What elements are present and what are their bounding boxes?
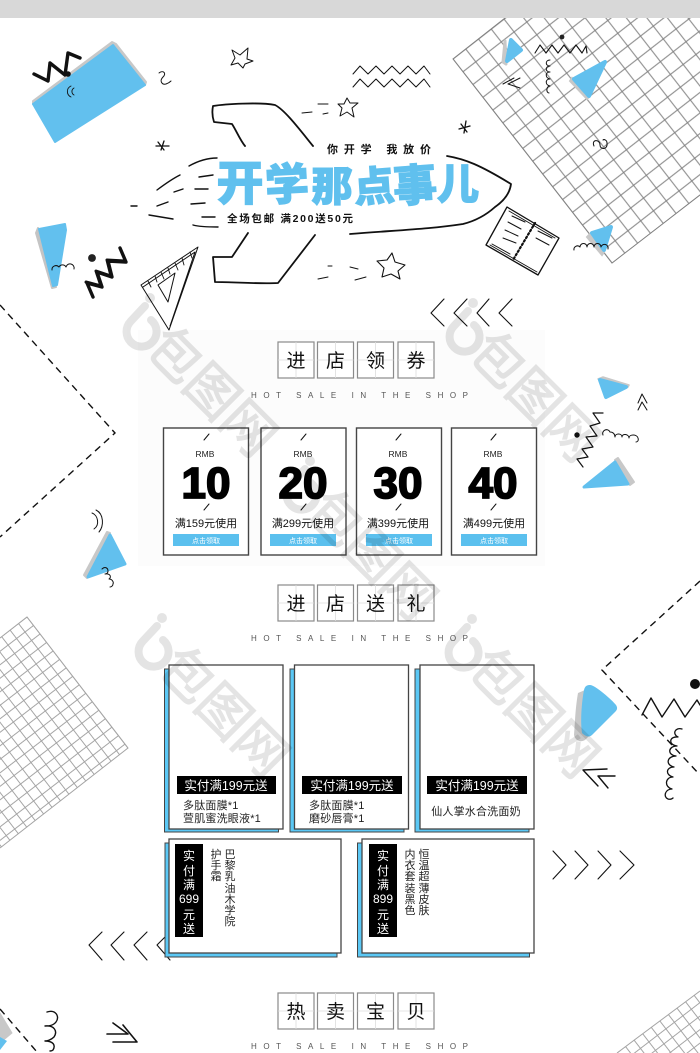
coupon card RMB 30 <box>356 428 442 555</box>
gift card 5 wide: 装 <box>404 882 416 895</box>
coupon card RMB 30: RMB <box>389 449 408 459</box>
coupon card RMB 40: 满499元使用 <box>463 517 525 530</box>
gift card 5 wide: 超 <box>418 869 430 883</box>
title: 儿 <box>437 161 479 208</box>
section heading: 进店领券 <box>278 342 434 378</box>
gift card 5 wide: 薄 <box>418 881 430 895</box>
gift card 4 wide: 元 <box>183 908 195 922</box>
rocket outline <box>212 103 511 283</box>
section heading: 热卖宝贝: 宝 <box>366 1001 385 1023</box>
gift card 5 wide: 付 <box>377 864 389 878</box>
coupon card RMB 20: 20 <box>279 459 327 508</box>
grid paper: top right <box>453 18 700 263</box>
coupon card RMB 20: 满299元使用 <box>272 517 334 530</box>
watermark 1: 包图网 <box>135 317 287 468</box>
gift card 2: 实付满199元送 <box>310 778 394 793</box>
gift card 5 wide: 黑 <box>404 893 416 906</box>
decoration: left triangle with arcs <box>84 510 125 587</box>
section heading: 进店领券: 券 <box>406 350 426 372</box>
decoration: bottom left doodles <box>0 1011 137 1051</box>
coupon card RMB 10: RMB <box>196 449 215 459</box>
coupon card RMB 20 <box>261 428 346 555</box>
title: 那 <box>312 164 352 210</box>
gift card 5 wide: 实 <box>377 848 389 863</box>
coupon section background panel <box>138 330 545 566</box>
gift card 5 wide: 温 <box>418 859 430 872</box>
title: 开 <box>216 157 264 210</box>
decoration: blue tilted rectangle with zigzag <box>33 42 146 142</box>
coupon card RMB 10: 10 <box>182 459 230 508</box>
icon: set square ruler <box>141 247 198 330</box>
gift card 1: 多肽面膜*1 <box>183 798 239 812</box>
section heading: 热卖宝贝: 卖 <box>326 1001 345 1023</box>
zigzag pair <box>353 66 430 87</box>
icon: star near rocket <box>338 98 358 117</box>
section heading: 进店送礼: 礼 <box>406 593 426 615</box>
gift card 5 wide: 满 <box>377 878 389 892</box>
gift card 3: 实付满199元送 <box>435 778 519 793</box>
gift card 4 wide: 实 <box>183 848 195 863</box>
coupon card RMB 30: 满399元使用 <box>367 517 429 530</box>
coupon card RMB 10 <box>164 428 248 555</box>
gift card 4 wide: 付 <box>183 864 195 878</box>
watermark 3: 包图网 <box>295 480 447 631</box>
section heading: 进店送礼: 店 <box>326 593 345 615</box>
title: 点 <box>352 163 396 211</box>
title <box>216 157 479 212</box>
gift card 4 wide: 木 <box>224 893 236 906</box>
section heading: 进店领券: 店 <box>326 350 345 372</box>
decoration: right side triangles and zigzag <box>574 377 647 487</box>
coupon card RMB 20: RMB <box>294 449 313 459</box>
section heading: 进店送礼: 进 <box>286 593 306 615</box>
gift card 5 wide: 899 <box>373 892 393 906</box>
gift card 5 wide: 衣 <box>404 858 416 872</box>
grid paper: lower left <box>0 617 128 848</box>
coupon card RMB 10: 点击领取 <box>192 536 220 545</box>
gift card 2: 多肽面膜*1 <box>309 798 365 812</box>
coupon card RMB 10: 满159元使用 <box>175 517 237 530</box>
coupon card RMB 30: 点击领取 <box>385 536 413 545</box>
section tagline 3: HOT SALE IN THE SHOP <box>251 1042 468 1051</box>
watermark 2: 包图网 <box>458 322 610 473</box>
watermark 5: 包图网 <box>457 638 609 789</box>
section heading: 进店送礼 <box>278 585 434 621</box>
icon: large star <box>377 253 405 279</box>
gift card 3 <box>415 665 534 832</box>
chevrons: left row <box>89 932 170 960</box>
chevrons: right row <box>553 851 634 879</box>
section tagline 2: HOT SALE IN THE SHOP <box>251 634 468 643</box>
coupon card RMB 20: 点击领取 <box>289 536 317 545</box>
gift card 4 wide: 满 <box>183 878 195 892</box>
dashed diamond outlines <box>0 305 700 1052</box>
coupon card RMB 40: 点击领取 <box>480 536 508 545</box>
gift card 4 wide <box>165 839 341 957</box>
section heading: 热卖宝贝 <box>278 993 434 1029</box>
gift card 4 wide: 护 <box>210 847 222 861</box>
gift card 2: 磨砂唇膏*1 <box>309 811 365 825</box>
title: 事 <box>391 161 439 212</box>
gift card 5 wide: 色 <box>404 903 416 917</box>
gift card 5 wide: 套 <box>404 870 416 883</box>
gift card 5 wide: 肤 <box>418 903 430 917</box>
gift card 4 wide: 乳 <box>224 870 236 883</box>
gift card 5 wide: 恒 <box>418 848 430 861</box>
gift card 5 wide: 送 <box>377 921 389 936</box>
grid paper: bottom right <box>617 991 700 1053</box>
small doodles: asterisks and squiggles <box>156 72 607 150</box>
title: 学 <box>264 160 310 211</box>
gift card 4 wide: 霜 <box>210 870 222 883</box>
coupon card RMB 40 <box>452 428 536 555</box>
gift card 1 <box>164 665 283 832</box>
gift card 4 wide: 油 <box>224 881 236 895</box>
gift card 1: 萱肌蜜洗眼液*1 <box>183 811 261 825</box>
rocket speed lines <box>131 104 366 280</box>
chevrons: top row <box>431 299 512 326</box>
section heading: 热卖宝贝: 热 <box>286 1001 306 1023</box>
watermark 4: 包图网 <box>147 637 299 788</box>
section tagline 1: HOT SALE IN THE SHOP <box>251 391 468 400</box>
gift card 4 wide: 手 <box>210 858 222 872</box>
gift card 5 wide: 皮 <box>418 893 430 906</box>
gift card 1: 实付满199元送 <box>184 778 268 793</box>
gift card 4 wide: 院 <box>224 914 236 928</box>
coupon card RMB 30: 30 <box>374 459 422 508</box>
gift card 5 wide <box>358 839 534 957</box>
blue shapes and doodles on top-right grid <box>503 35 611 255</box>
coupon card RMB 40: 40 <box>469 459 517 508</box>
icon: open notebook <box>486 207 559 275</box>
gift card 4 wide: 黎 <box>224 858 236 872</box>
section heading: 进店送礼: 送 <box>366 593 385 615</box>
section heading: 进店领券: 进 <box>286 350 306 372</box>
gift card 3: 仙人掌水合洗面奶 <box>431 804 521 818</box>
section heading: 热卖宝贝: 贝 <box>406 1002 426 1023</box>
decoration: right side blue triangle with zigzag and spring <box>574 679 700 799</box>
icon: star top <box>231 48 253 68</box>
gift card 4 wide: 699 <box>179 892 199 906</box>
coupon card RMB 40: RMB <box>484 449 503 459</box>
gift card 5 wide: 内 <box>404 847 416 861</box>
decoration: blue wedge with curl and thick zigzag <box>36 224 126 297</box>
subtitle top: 你开学 我放价 <box>327 142 431 156</box>
top grey bar <box>0 0 700 18</box>
gift card 4 wide: 学 <box>224 903 236 917</box>
gift card 5 wide: 元 <box>377 908 389 922</box>
subtitle bottom: 全场包邮 满200送50元 <box>227 212 354 225</box>
section heading: 进店领券: 领 <box>366 350 385 372</box>
gift card 2 <box>290 665 408 832</box>
gift card 4 wide: 送 <box>183 921 195 936</box>
gift card 4 wide: 巴 <box>224 849 236 861</box>
